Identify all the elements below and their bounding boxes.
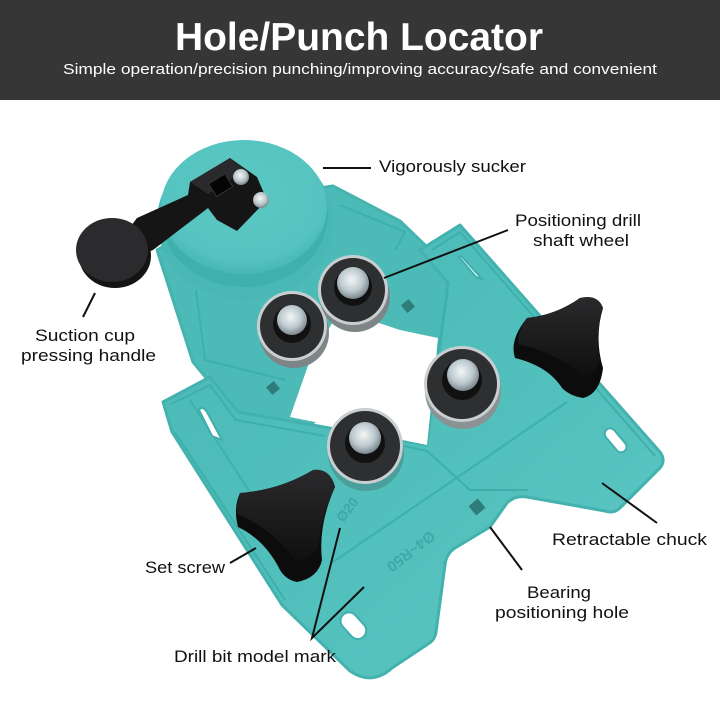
wheel 3 <box>424 346 501 429</box>
title: Hole/Punch Locator <box>175 16 543 59</box>
slots <box>199 256 629 643</box>
left knob <box>236 470 335 582</box>
square holes <box>266 299 485 515</box>
wheel 1 <box>257 291 329 368</box>
label: bearing positioning hole: Bearing <box>527 584 591 602</box>
subtitle: Simple operation/precision punching/improving accuracy/safe and convenient <box>63 61 658 78</box>
label: drill bit model mark: Drill bit model mark <box>174 648 337 666</box>
header banner <box>0 0 720 100</box>
suction cup <box>157 140 333 300</box>
molded markings: Ø4~R50 <box>383 527 438 575</box>
wheel 2 <box>318 255 390 332</box>
molded markings <box>333 494 438 575</box>
label: bearing positioning hole: positioning hole <box>495 604 629 622</box>
label: suction cup pressing handle <box>21 293 156 365</box>
label: set screw <box>145 548 256 577</box>
label: positioning drill shaft wheel: Positioning drill <box>515 212 641 230</box>
label: vigorously sucker: Vigorously sucker <box>379 158 527 176</box>
plate ridges <box>171 205 655 600</box>
upper plate <box>157 186 452 430</box>
right knob <box>514 297 603 398</box>
label: drill bit model mark <box>174 528 364 666</box>
label: positioning drill shaft wheel: shaft wheel <box>533 232 629 250</box>
suction cup pressing handle <box>76 158 269 288</box>
label: set screw: Set screw <box>145 559 225 577</box>
main sliding plate <box>163 225 663 678</box>
label: retractable chuck: Retractable chuck <box>552 531 708 549</box>
label: retractable chuck <box>552 483 708 549</box>
label: suction cup pressing handle: pressing handle <box>21 347 156 365</box>
product: drill locator <box>76 140 663 678</box>
label: bearing positioning hole <box>490 527 629 622</box>
label: positioning drill shaft wheel <box>384 212 641 278</box>
wheel 4 <box>327 408 404 491</box>
molded markings: Ø20 <box>333 494 362 525</box>
label: suction cup pressing handle: Suction cup <box>35 327 135 345</box>
white centre opening <box>290 310 438 445</box>
